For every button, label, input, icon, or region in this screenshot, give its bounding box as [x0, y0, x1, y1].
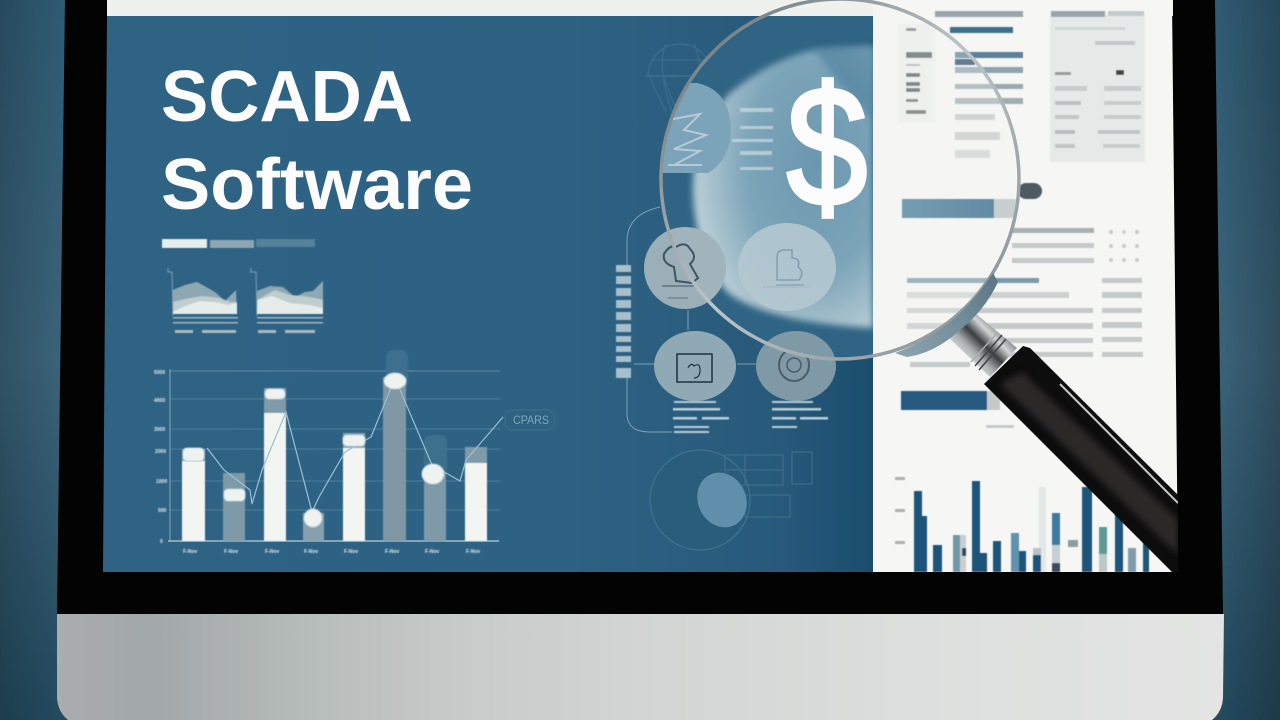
chart axis labels: F-Nov [265, 549, 279, 555]
lens: upper fold of glow [816, 48, 872, 116]
barcode strip [616, 265, 631, 378]
chart callout [505, 410, 555, 430]
bar chart: report columns [895, 477, 1149, 572]
chart axis labels: 4000 [154, 398, 165, 404]
handle ferrule [949, 313, 1017, 377]
report table: top block [935, 11, 1023, 158]
chart axis labels: 2000 [155, 449, 166, 455]
screen top strip [107, 0, 1173, 16]
chart axis labels: F-Nov [183, 549, 197, 555]
process captions [673, 401, 828, 433]
report card: small summary [905, 27, 933, 115]
chart bars [182, 377, 487, 541]
chart axis labels [154, 370, 480, 555]
lens: bright glow blob [693, 47, 873, 328]
icon: globe outline [646, 44, 712, 112]
chart axis labels: F-Nov [224, 549, 238, 555]
progress bar two [901, 391, 1000, 410]
chart axis labels: F-Nov [304, 549, 318, 555]
text list block [907, 228, 1143, 367]
legend bars [162, 239, 315, 248]
lens: magnified text lines [732, 108, 773, 170]
monitor bezel [57, 0, 1223, 614]
process diagram connectors [627, 207, 756, 432]
rim collar [895, 273, 998, 357]
pie and floor plan ghost [650, 450, 812, 550]
panel: white report page [873, 0, 1179, 572]
icon: circle document [654, 331, 736, 401]
dot grid icon [1109, 230, 1139, 262]
chart axis labels: F-Nov [344, 549, 358, 555]
chart axis labels: 3000 [154, 427, 165, 433]
chart ghost bars [386, 350, 447, 475]
progress bar one [902, 183, 1042, 218]
bar chart: main combo chart [154, 350, 555, 555]
icon: circle person [644, 227, 726, 309]
lens: white veil over report [902, 28, 1016, 329]
title [161, 57, 473, 225]
dollar sign: $ [787, 52, 867, 242]
chart axis labels: 0 [160, 539, 163, 545]
chart axis labels: 1000 [156, 479, 167, 485]
chart axis labels: F-Nov [425, 549, 439, 555]
title: Software [161, 145, 473, 225]
chart axis labels: F-Nov [466, 549, 480, 555]
chart axis labels: 5000 [154, 370, 165, 376]
chart value markers [183, 373, 444, 527]
magnifier rim [661, 0, 1019, 359]
chart callout: CPARS [513, 413, 549, 427]
area chart: right [251, 268, 323, 333]
chart axis labels: F-Nov [385, 549, 399, 555]
report card: grey data card [1050, 11, 1145, 162]
chart grid and axes [168, 369, 500, 541]
handle sheen [1000, 372, 1178, 555]
chart axis labels: 500 [158, 508, 167, 514]
small caption [986, 425, 1014, 428]
magnifier lens [662, 16, 1016, 358]
lens: circle icon [738, 223, 836, 311]
monitor stand base [57, 614, 1224, 720]
lens: magnified blue area [662, 16, 873, 358]
handle highlight [1060, 384, 1178, 503]
magnifier handle [949, 313, 1178, 572]
chart trend line [207, 378, 503, 512]
icon: circle target [756, 331, 836, 401]
lens: target circle inside glass [768, 331, 835, 358]
title: SCADA [161, 57, 413, 137]
panel: blue dashboard [103, 16, 873, 572]
area chart: left [168, 268, 238, 333]
lens: faint icon disc [662, 83, 731, 173]
lens: person circle inside glass [670, 227, 726, 300]
handle grip [984, 346, 1178, 572]
